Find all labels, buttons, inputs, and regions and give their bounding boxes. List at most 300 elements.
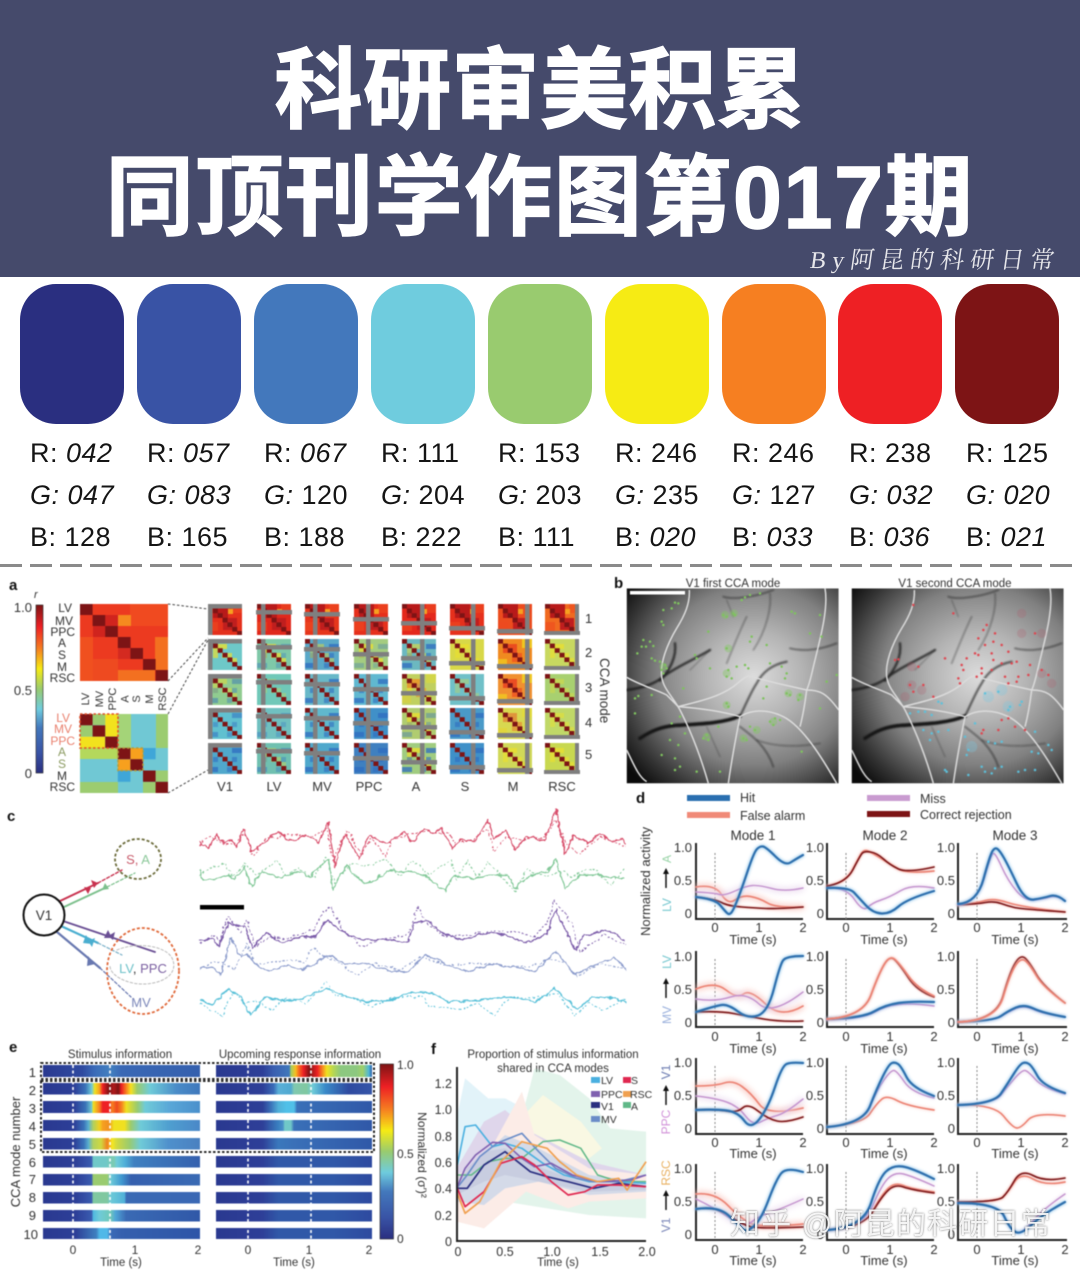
RGB values 5: R: 153 [498,438,581,468]
column area labels: M [508,779,518,794]
column area labels: A [412,779,421,794]
plot row 1 mode 3: 2 [1061,920,1069,935]
top matrix row labels: MV [55,614,73,628]
column area labels: LV [267,779,282,794]
plot row 2 mode 1 [674,949,807,1056]
plot row 2 mode 3 [937,949,1069,1056]
row labels with arrows: LV [660,955,674,969]
RGB values 8 [849,438,933,552]
links from V1 to areas [57,870,174,997]
RGB values 2 [147,438,231,552]
top correlation matrix [80,604,168,681]
column area labels [217,779,576,794]
column labels between matrices: LV [80,692,92,705]
plot row 3 mode 2 [806,1055,938,1161]
legend: Miss [920,792,946,806]
panel b: cortex images [614,575,1064,783]
plot row 4 mode 1: 2 [799,1242,807,1257]
plot row 3 mode 1: 1.0 [674,1055,692,1070]
x axis ticks and title: Time (s) [537,1257,579,1269]
legend: RSC [630,1089,653,1101]
image title first mode: V1 first CCA mode [686,578,780,590]
x axis ticks and titles: Time (s) [100,1257,142,1269]
chart title: shared in CCA modes [497,1063,609,1075]
legend: PPC [601,1089,623,1101]
panel c: network diagram and traces [7,808,627,1017]
x axis ticks and titles: 0 [245,1243,252,1257]
row mode numbers: 4 [585,715,592,730]
column labels between matrices: A [120,695,132,703]
RGB values 3: B: 188 [264,522,345,552]
colour swatch 7 [722,284,826,424]
plot row 3 mode 1: 0 [711,1135,719,1150]
plot row 1 mode 1: 2 [799,920,807,935]
plot row 3 mode 1: Time (s) [729,1146,777,1161]
plot row 1 mode 1: 0 [685,906,692,921]
top matrix row labels [50,601,75,685]
zoom guide dotted lines [168,604,208,793]
colour bar r: 0.5 [14,683,32,698]
row labels with arrows: LV [660,898,674,912]
plot row 1 mode 1 [674,840,807,947]
mode number labels: 2 [29,1083,36,1098]
plot row 4 mode 3: 0 [948,1227,955,1242]
legend: Hit [740,791,756,805]
mode number labels: 1 [29,1065,36,1080]
plot row 1 mode 2: 0 [817,906,824,921]
axis title CCA mode: CCA mode [597,658,612,723]
plot row 1 mode 3: 0 [948,906,955,921]
bottom matrix row labels: M [57,769,67,783]
y axis ticks: 0.4 [435,1182,452,1196]
watermark: 知乎 @阿昆的科研日常 [730,1208,1052,1241]
RGB values 2: R: 057 [147,438,230,468]
RGB values 6: B: 020 [615,522,696,552]
plot row 2 mode 1: 2 [799,1029,807,1044]
top matrix row labels: A [58,636,66,650]
arrowheads on links [83,880,115,966]
RGB values 9 [966,438,1050,552]
plot row 4 mode 2 [806,1161,938,1268]
plot row 4 mode 1: 1.0 [674,1161,692,1176]
plot row 4 mode 1: 0 [685,1227,692,1242]
column area labels: PPC [356,779,382,794]
panel letter a: a [9,577,18,594]
colour bar r: 0 [25,766,32,781]
legend: S [631,1075,638,1087]
plot row 1 mode 2: Time (s) [860,932,908,947]
plot row 1 mode 3 [937,840,1069,947]
node LV, PPC, MV [107,928,179,1014]
plot row 4 mode 3: Time (s) [991,1253,1039,1268]
plot row 2 mode 3: 0.5 [937,982,955,997]
small matrix grid [208,604,580,774]
node LV, PPC, MV: LV, PPC [119,961,167,976]
x axis ticks and titles: Time (s) [273,1257,315,1269]
RGB values 4: B: 222 [381,522,462,552]
plot row 4 mode 2: Time (s) [860,1253,908,1268]
colour bar title: Normalized (σ′)² [415,1112,429,1198]
plot row 1 mode 2: 2 [930,920,938,935]
node LV, PPC, MV: MV [131,995,151,1010]
colour bar: 1.0 [397,1058,414,1072]
author signature: By阿昆的科研日常 [808,248,1062,274]
RGB values 3: R: 067 [264,438,347,468]
legend: False alarm [740,809,805,823]
colour swatch 1 [20,284,124,424]
legend [687,791,1012,823]
plot row 4 mode 3: 2 [1061,1242,1069,1257]
node V1 [24,894,64,936]
RGB values 3 [264,438,348,552]
plot row 1 mode 2 [806,840,938,947]
colour bar r [14,589,43,781]
plot row 2 mode 3: 2 [1061,1029,1069,1044]
legend: LV [601,1075,613,1087]
plot row 3 mode 1: 1 [755,1135,763,1150]
plot row 2 mode 2: 0 [842,1029,850,1044]
x axis ticks and titles: 1 [306,1243,313,1257]
colour bar r: 1.0 [14,600,32,615]
panel a: correlation matrices [9,577,612,794]
colour swatch 2 [137,284,241,424]
plot row 2 mode 1: Time (s) [729,1041,777,1056]
y axis title: Normalized activity [638,826,653,936]
plot row 3 mode 3: 0 [973,1135,981,1150]
plot row 1 mode 1: 1.0 [674,840,692,855]
plot row 3 mode 2: 2 [930,1135,938,1150]
RGB values 3: G: 120 [264,480,348,510]
column area labels: RSC [548,779,576,794]
row labels with arrows: V1 [659,1217,673,1232]
plot row 2 mode 2: 1 [886,1029,894,1044]
plot row 4 mode 3: 0 [973,1242,981,1257]
top matrix row labels: LV [58,601,72,615]
plot row 4 mode 1: 1 [755,1242,763,1257]
RGB values 8: G: 032 [849,480,933,510]
legend: Correct rejection [920,808,1012,822]
cortex image with red and blue neurons [852,588,1064,783]
plot row 4 mode 2: 2 [930,1242,938,1257]
cortex image with green neurons [627,588,839,783]
y axis ticks: 1.0 [435,1103,452,1117]
bottom matrix row labels: RSC [50,780,75,794]
mode number labels: 3 [29,1101,36,1116]
mode headings: Mode 2 [862,828,908,843]
plot row 1 mode 3: 1 [1017,920,1025,935]
title line 1: 科研审美积累 [274,41,806,140]
row mode numbers [585,611,592,762]
panel letter d: d [636,790,645,807]
node S, A [115,839,161,879]
plot row 4 mode 2: 0.5 [806,1194,824,1209]
plot row 3 mode 1: 2 [799,1135,807,1150]
plot row 3 mode 2: 1.0 [806,1055,824,1070]
top matrix row labels: PPC [50,625,75,639]
plot row 4 mode 2: 0 [842,1242,850,1257]
plot row 2 mode 1: 0 [711,1029,719,1044]
mode number labels: 7 [29,1172,36,1187]
RGB values 2: B: 165 [147,522,228,552]
mode headings: Mode 1 [730,828,776,843]
heatmap headings [68,1049,381,1061]
colour bar: 0.5 [397,1147,414,1161]
chart title [467,1049,639,1075]
plot row 2 mode 3: Time (s) [991,1041,1039,1056]
plot row 3 mode 3 [937,1055,1069,1161]
plot row 2 mode 2 [806,949,938,1056]
RGB values 7: B: 033 [732,522,813,552]
column area labels: MV [312,779,332,794]
title line 2: 同顶刊学作图第017期 [106,148,974,247]
bottom correlation matrix [80,714,168,793]
RGB values 7: R: 246 [732,438,815,468]
column labels between matrices: M [144,694,156,704]
plot row 2 mode 3: 0 [973,1029,981,1044]
plot row 4 mode 1: Time (s) [729,1253,777,1268]
panel letter e: e [9,1039,17,1056]
title banner [0,0,1080,277]
node V1: V1 [36,908,52,923]
stimulus information heatmap [43,1065,200,1239]
colour swatch 9 [955,284,1059,424]
legend: MV [601,1114,617,1126]
bottom matrix row labels: S [58,757,66,771]
plot row 1 mode 1: 1 [755,920,763,935]
mode number labels: 9 [29,1208,36,1223]
x axis ticks and title [455,1245,656,1269]
mode number labels: 4 [29,1119,36,1134]
colour bar [380,1058,414,1246]
plot row 1 mode 2: 1.0 [806,840,824,855]
RGB values 2: G: 083 [147,480,231,510]
plot row 1 mode 1: 0.5 [674,873,692,888]
colour swatch 8 [838,284,942,424]
plot row 2 mode 2: 0 [817,1015,824,1030]
y axis title: CCA mode number [8,1096,23,1207]
panel e: information heatmaps [8,1039,429,1269]
panel f: shared information line chart [431,1041,656,1269]
colour swatch 6 [605,284,709,424]
column labels between matrices: S [131,695,143,703]
panel letter b: b [614,575,623,592]
row mode numbers: 3 [585,680,592,695]
RGB values 1: R: 042 [30,438,113,468]
colour swatch 3 [254,284,358,424]
mode number labels: 8 [29,1190,36,1205]
plot row 3 mode 3: 0.5 [937,1088,955,1103]
x axis ticks and title: 0.5 [496,1245,514,1259]
bottom matrix row labels: LV [56,711,70,725]
plot row 1 mode 3: 1.0 [937,840,955,855]
row labels with arrows: PPC [659,1109,673,1134]
x axis ticks and title: 1.5 [591,1245,609,1259]
node S, A: S, A [126,852,150,867]
RGB values 1: G: 047 [30,480,114,510]
plot row 4 mode 1: 0.5 [674,1194,692,1209]
x axis ticks and title: 0 [455,1245,462,1259]
row mode numbers: 2 [585,645,592,660]
plot row 3 mode 3: 2 [1061,1135,1069,1150]
plot row 4 mode 1 [674,1161,807,1268]
plot row 2 mode 2: 1.0 [806,949,824,964]
heatmap headings: Upcoming response information [219,1049,381,1061]
row labels with arrows: RSC [659,1160,673,1186]
bottom matrix row labels: PPC [50,734,75,748]
column labels between matrices: MV [94,690,106,707]
plot row 4 mode 2: 0 [817,1227,824,1242]
legend: A [631,1101,638,1113]
colour swatch 4 [371,284,475,424]
dashed selection boxes [41,1063,374,1152]
RGB values 6: R: 246 [615,438,698,468]
plot row 2 mode 2: Time (s) [860,1041,908,1056]
top matrix row labels: M [57,660,67,674]
plot row 4 mode 1: 0 [711,1242,719,1257]
plot row 1 mode 3: 0.5 [937,873,955,888]
legend [591,1075,653,1126]
row mode numbers: 5 [585,747,592,762]
confidence bands [457,1068,646,1228]
bottom matrix row labels: A [58,745,66,759]
plot row 3 mode 2: 0 [842,1135,850,1150]
plot row 3 mode 2: 0 [817,1121,824,1136]
chart axes [457,1067,646,1241]
column area labels: V1 [217,779,233,794]
RGB values 4 [381,438,465,552]
panel letter c: c [7,808,15,825]
x axis ticks and titles: 2 [195,1243,202,1257]
y axis ticks: 0.2 [435,1209,452,1223]
plot row 1 mode 2: 1 [886,920,894,935]
plot row 4 mode 3: 0.5 [937,1194,955,1209]
row labels with arrows: V1 [659,1064,673,1079]
x axis ticks and title: 2.0 [638,1245,656,1259]
plot row 2 mode 3: 0 [948,1015,955,1030]
legend: V1 [601,1101,614,1113]
plot row 1 mode 2: 0.5 [806,873,824,888]
mode headings: Mode 3 [992,828,1038,843]
y axis ticks: 0 [445,1235,452,1249]
heatmap headings: Stimulus information [68,1049,172,1061]
column labels between matrices [80,687,169,711]
y axis ticks: 1.2 [435,1077,452,1091]
plot row 1 mode 1: 0 [711,920,719,935]
row mode numbers: 1 [585,611,592,626]
image title second mode: V1 second CCA mode [898,578,1012,590]
top matrix row labels: RSC [50,671,75,685]
x axis ticks and title: 1.0 [543,1245,561,1259]
mode lines [457,1125,646,1213]
plot row 1 mode 1: Time (s) [729,932,777,947]
scale bar [630,591,685,594]
plot row 4 mode 3 [937,1161,1069,1268]
RGB values 6 [615,438,699,552]
plot row 3 mode 3: 1 [1017,1135,1025,1150]
column area labels: S [461,779,470,794]
plot row 1 mode 3: Time (s) [991,932,1039,947]
y axis ticks [435,1077,452,1249]
plot row 3 mode 1: 0.5 [674,1088,692,1103]
plot row 3 mode 1: 0 [685,1121,692,1136]
bottom matrix row labels [50,711,75,794]
RGB values 5: B: 111 [498,522,575,552]
RGB values 1 [30,438,114,552]
mode number labels [24,1065,38,1242]
mode number labels: 5 [29,1137,36,1152]
bottom matrix row labels: MV [54,722,72,736]
RGB values 5 [498,438,582,552]
RGB values 6: G: 235 [615,480,699,510]
x axis ticks and titles: 0 [70,1243,77,1257]
plot row 4 mode 2: 1.0 [806,1161,824,1176]
RGB values 7 [732,438,816,552]
x axis ticks and titles [70,1243,373,1269]
plot row 2 mode 1: 0 [685,1015,692,1030]
plot row 2 mode 1: 1.0 [674,949,692,964]
row labels with arrows: A [660,855,674,863]
plot row 2 mode 2: 2 [930,1029,938,1044]
plot row 1 mode 3: 0 [973,920,981,935]
RGB values 8: R: 238 [849,438,932,468]
plot row 4 mode 3: 1.0 [937,1161,955,1176]
row labels with arrows: MV [660,1006,674,1024]
chart title: Proportion of stimulus information [467,1049,639,1061]
plot row 3 mode 2: Time (s) [860,1146,908,1161]
panel letter f: f [431,1041,437,1058]
activity traces [200,810,627,1017]
RGB values 4: G: 204 [381,480,465,510]
plot row 2 mode 3: 1.0 [937,949,955,964]
scale bar [200,905,244,910]
plot row 3 mode 3: Time (s) [991,1146,1039,1161]
upcoming response heatmap [216,1065,372,1239]
mode headings [730,828,1038,843]
x axis ticks and titles: 1 [132,1243,139,1257]
column labels between matrices: RSC [157,687,169,711]
mode number labels: 10 [24,1227,38,1242]
plot row 2 mode 1: 0.5 [674,982,692,997]
y axis ticks: 0.6 [435,1156,452,1170]
plot row 3 mode 3: 0 [948,1121,955,1136]
plot row 4 mode 3: 1 [1017,1242,1025,1257]
RGB values 9: G: 020 [966,480,1050,510]
colour bar r: r [34,589,39,601]
row labels with arrows [659,855,674,1232]
panel d: normalized activity [636,790,1069,1268]
RGB values 4: R: 111 [381,438,460,468]
RGB values 8: B: 036 [849,522,930,552]
colour bar: 0 [397,1232,404,1246]
RGB values 9: R: 125 [966,438,1049,468]
plot row 3 mode 2: 0.5 [806,1088,824,1103]
mode number labels: 6 [29,1155,36,1170]
colour swatch 5 [488,284,592,424]
plot row 3 mode 3: 1.0 [937,1055,955,1070]
top matrix row labels: S [58,648,66,662]
column labels between matrices: PPC [107,688,119,710]
plot row 2 mode 1: 1 [755,1029,763,1044]
plot row 3 mode 1 [674,1055,807,1161]
plot row 2 mode 3: 1 [1017,1029,1025,1044]
RGB values 7: G: 127 [732,480,816,510]
RGB values 1: B: 128 [30,522,111,552]
RGB values 9: B: 021 [966,522,1047,552]
plot row 4 mode 2: 1 [886,1242,894,1257]
x axis ticks and titles: 2 [366,1243,373,1257]
RGB values 5: G: 203 [498,480,582,510]
y axis ticks: 0.8 [435,1130,452,1144]
